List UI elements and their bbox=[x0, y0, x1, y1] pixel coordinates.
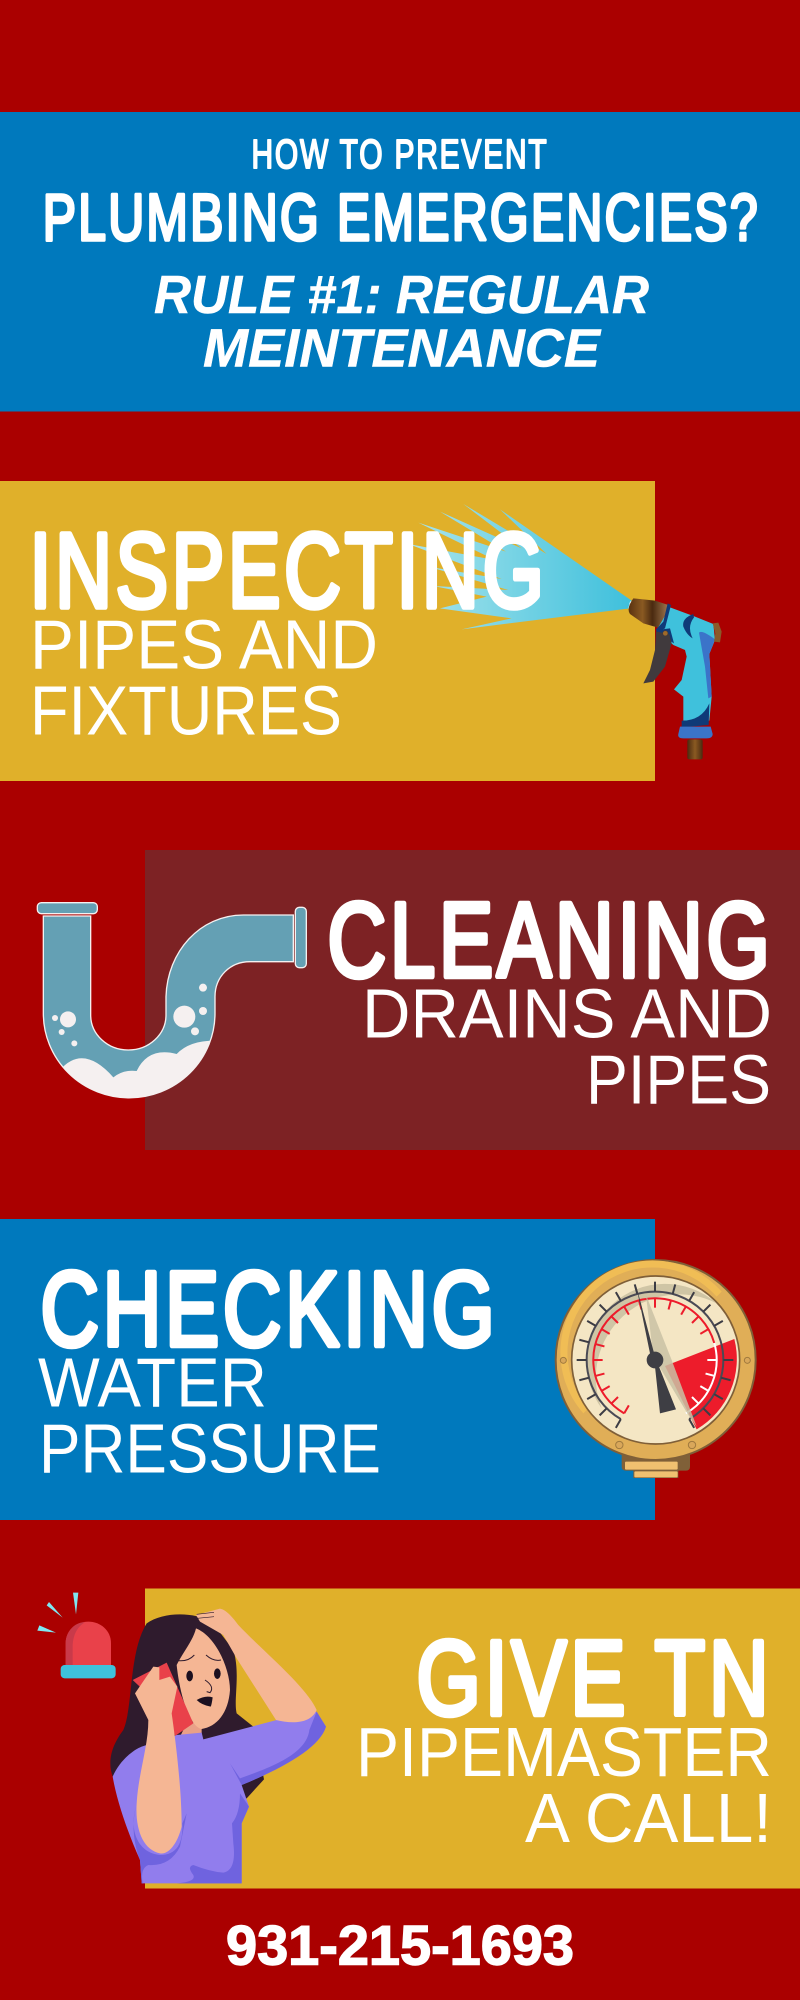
icon: p-trap pipe bbox=[37, 903, 306, 1113]
heading: checking: CHECKING bbox=[40, 1250, 498, 1368]
panel: header bbox=[0, 112, 800, 412]
text: pipemaster a call: A CALL! bbox=[525, 1779, 772, 1857]
text: pipes and fixtures: FIXTURES bbox=[30, 672, 342, 750]
text: water pressure: PRESSURE bbox=[39, 1410, 381, 1488]
heading: how to prevent: HOW TO PREVENT bbox=[252, 131, 548, 177]
panel: checking bbox=[0, 1219, 756, 1520]
text: drains and pipes bbox=[362, 974, 772, 1118]
text: pipes and fixtures: PIPES AND bbox=[30, 606, 378, 684]
panel: inspecting bbox=[0, 481, 722, 781]
subtitle: rule: MEINTENANCE bbox=[203, 318, 602, 378]
phone number: 931-215-1693 bbox=[226, 1914, 574, 1976]
heading: inspecting: INSPECTING bbox=[30, 512, 548, 630]
icon: pressure gauge bbox=[556, 1260, 756, 1478]
panel: cleaning bbox=[37, 850, 800, 1150]
text: water pressure: WATER bbox=[38, 1344, 267, 1422]
text: pipes and fixtures bbox=[30, 606, 378, 750]
text: drains and pipes: DRAINS AND bbox=[362, 974, 772, 1052]
text: drains and pipes: PIPES bbox=[586, 1040, 771, 1118]
panel: give a call bbox=[37, 1588, 800, 1888]
text: pipemaster a call bbox=[356, 1713, 772, 1857]
text: water pressure bbox=[38, 1344, 381, 1488]
text: pipemaster a call: PIPEMASTER bbox=[356, 1713, 772, 1791]
icon: spray nozzle bbox=[408, 504, 722, 759]
subtitle: rule: RULE #1: REGULAR bbox=[154, 265, 649, 325]
illustration: worried woman on phone bbox=[110, 1609, 326, 1883]
icon: alarm light bbox=[37, 1593, 116, 1678]
subtitle: rule bbox=[154, 265, 649, 378]
